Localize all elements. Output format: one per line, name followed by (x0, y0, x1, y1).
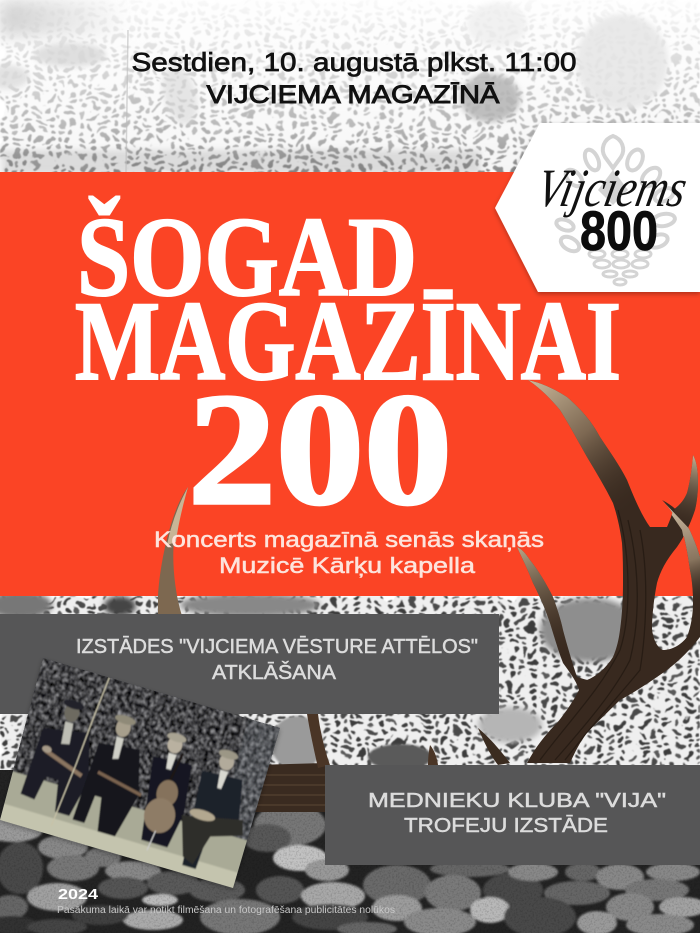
red banner (0, 172, 700, 596)
icon: pine cone (555, 136, 676, 285)
footer: year: 2024 (58, 886, 99, 903)
text: exhibition opening: IZSTĀDES "VIJCIEMA VĒSTURE ATTĒLOS" (76, 635, 478, 658)
logo number: 800 (580, 199, 658, 262)
text: hunters club trophies (368, 790, 666, 837)
musician 4 with case (181, 748, 244, 870)
background: middle pebble texture (0, 591, 700, 886)
text: hunters club trophies: TROFEJU IZSTĀDE (404, 814, 608, 837)
panel: trophy box (325, 765, 700, 865)
antler: main antler (428, 370, 700, 770)
musician 2 (72, 714, 142, 837)
background: top pebble texture (0, 0, 700, 175)
text: exhibition opening: ATKLĀŠANA (212, 661, 337, 684)
footer: notice: Pasākuma laikā var notikt filmēšana un fotografēšana publicitātes nolūkos (57, 905, 395, 916)
heading: location: VIJCIEMA MAGAZĪNĀ (206, 81, 500, 109)
logo badge (495, 123, 700, 292)
title: 200 (188, 360, 452, 538)
musician 1 (20, 699, 90, 816)
background: bottom stones (0, 770, 700, 933)
photo: old musicians (0, 658, 281, 890)
antler: small left antler and base (158, 487, 330, 812)
subtitle: concert: Koncerts magazīnā senās skaņās (154, 527, 544, 552)
heading: date and time: Sestdien, 10. augustā plkst. 11:00 (132, 47, 576, 77)
text: hunters club trophies: MEDNIEKU KLUBA "VIJA" (368, 790, 666, 812)
subtitle: concert (154, 527, 544, 578)
subtitle: concert: Muzicē Kārķu kapella (219, 553, 476, 578)
musician 3 with cello (140, 731, 192, 850)
panel: exhibition box (0, 614, 499, 714)
text: exhibition opening (76, 635, 478, 684)
title: ŠOGAD (77, 195, 417, 320)
title (75, 195, 621, 538)
